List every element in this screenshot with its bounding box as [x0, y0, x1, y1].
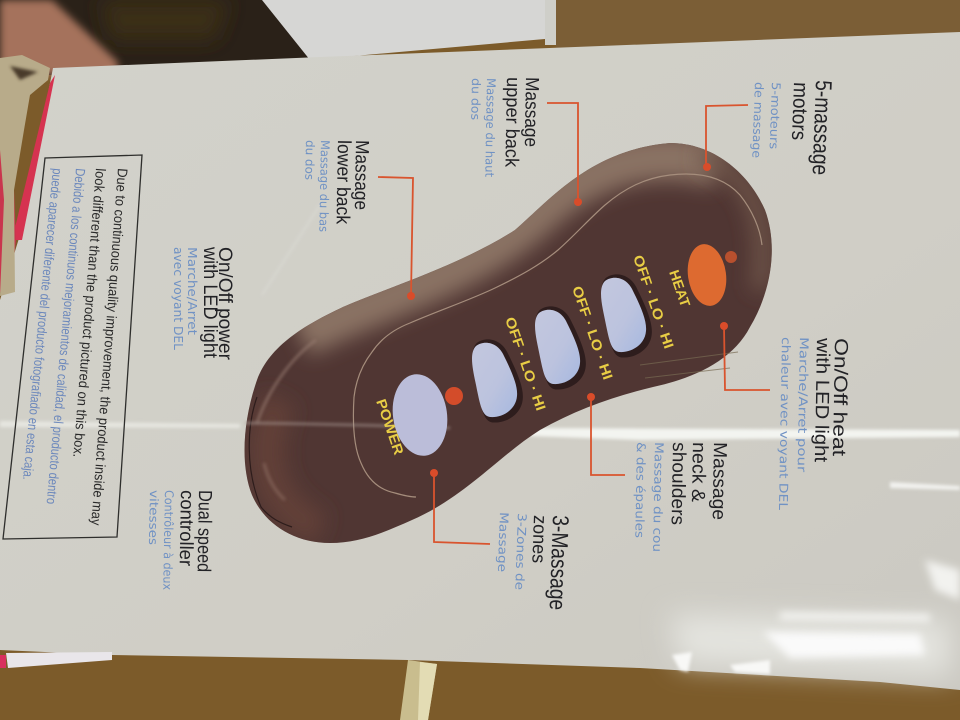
slider 3	[601, 274, 652, 358]
power button	[388, 371, 452, 459]
label: massage neck and shoulders: neck &	[687, 442, 709, 503]
label: power: POWER	[373, 397, 407, 457]
label: massage neck and shoulders: shoulders	[667, 442, 689, 525]
massager controller	[245, 143, 772, 543]
label: massage lower back	[302, 140, 372, 232]
slider 2	[535, 306, 586, 390]
crease across body	[245, 423, 450, 428]
massager body	[245, 143, 772, 543]
heat button	[684, 242, 730, 308]
body groove	[353, 174, 762, 497]
label: 5-massage motors: 5-massage	[808, 80, 837, 176]
label: dual speed controller: controller	[175, 490, 197, 567]
label: 5-massage motors	[749, 80, 837, 176]
outer rim lines	[249, 340, 316, 527]
label: massage upper back: du dos	[468, 78, 483, 120]
label: on/off heat: chaleur avec voyant DEL	[776, 337, 793, 511]
label: massage lower back: Massage du bas	[316, 140, 332, 232]
label: massage lower back: Massage	[350, 140, 372, 210]
label: 3-massage zones: 3-Massage	[545, 515, 574, 611]
disclaimer box: Debido a los continuos mejoramientos de calidad, el producto dentro	[44, 168, 88, 505]
label: 5-massage motors: motors	[787, 82, 812, 141]
callout lines	[378, 103, 770, 544]
disclaimer box: Due to continuous quality improvement, the product inside may	[88, 168, 131, 526]
label: on/off power	[171, 246, 235, 361]
label: massage neck and shoulders: Massage du cou	[650, 442, 666, 552]
label: 3-massage zones	[495, 512, 574, 611]
body shading	[267, 155, 763, 530]
label: 5-massage motors: 5-moteurs	[767, 82, 783, 149]
label: slider 1 speeds: OFF · LO · HI	[502, 315, 549, 413]
label: on/off power: Marche/Arret	[185, 247, 199, 335]
label: on/off power: On/Off power	[214, 247, 235, 361]
label: slider 3 speeds: OFF · LO · HI	[630, 253, 677, 351]
label: massage upper back: Massage du haut	[482, 78, 498, 177]
torn corner and pink edge	[0, 55, 112, 668]
label: on/off heat: with LED light	[810, 337, 833, 463]
label: on/off power: avec voyant DEL	[171, 247, 185, 350]
disclaimer box	[3, 155, 142, 539]
glossy reflections	[0, 205, 960, 675]
label: dual speed controller: Contrôleur à deux	[160, 490, 176, 590]
label: on/off heat: Marche/Arret pour	[795, 337, 811, 472]
label: slider 2 speeds: OFF · LO · HI	[569, 284, 616, 382]
label: on/off heat: On/Off heat	[828, 338, 851, 457]
label: on/off heat	[776, 337, 851, 511]
disclaimer box: look different than the product pictured on this box.	[70, 168, 109, 458]
label: massage neck and shoulders: Massage	[708, 442, 730, 520]
label: 5-massage motors: de massage	[749, 82, 766, 158]
label: dual speed controller	[146, 490, 215, 590]
label: on/off power: with LED light	[199, 246, 220, 359]
label: massage upper back: Massage	[520, 77, 542, 147]
heat LED	[725, 251, 737, 263]
label: 3-massage zones: Massage	[495, 512, 511, 572]
power LED	[445, 387, 463, 405]
label: massage upper back	[468, 77, 542, 177]
label: massage neck and shoulders	[632, 442, 730, 552]
label: dual speed controller: vitesses	[146, 490, 161, 545]
label: dual speed controller: Dual speed	[193, 490, 215, 572]
label: massage neck and shoulders: & des épaules	[632, 442, 648, 538]
faint surface lines	[640, 352, 738, 378]
label: massage upper back: upper back	[500, 77, 523, 168]
disclaimer box: puede aparecer diferente del producto fotografiado en esta caja.	[20, 168, 65, 481]
label: 3-massage zones: 3-Zones de	[512, 513, 529, 590]
label: heat: HEAT	[666, 268, 694, 309]
label: massage lower back: lower back	[332, 140, 354, 225]
label: 3-massage zones: zones	[527, 515, 550, 564]
slider 1	[472, 339, 523, 423]
label: massage lower back: du dos	[302, 140, 317, 180]
